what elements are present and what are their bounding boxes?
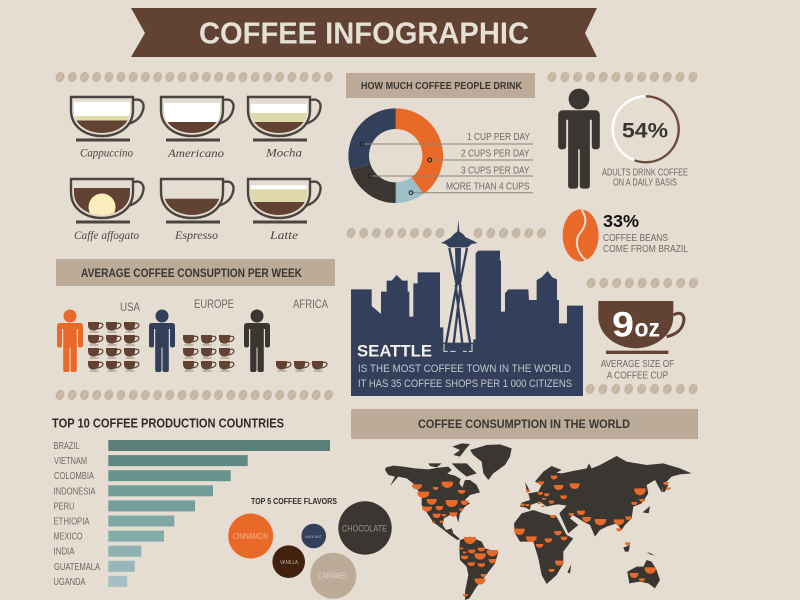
USA group: USA [120,300,140,314]
Europe group [149,297,234,372]
stat: 9oz cup: AVERAGE SIZE OF [601,359,674,370]
bar chart: top 10 countries: COLOMBIA [54,471,94,482]
panel: top 5 flavors: TOP 5 COFFEE FLAVORS [251,497,338,506]
stat: 33% coffee beans: COME FROM BRAZIL [603,244,688,255]
heading: how much coffee people drink: HOW MUCH COFFEE PEOPLE DRINK [361,80,522,92]
bar chart: top 10 countries [54,440,330,588]
heading: how much coffee people drink [346,73,535,98]
Africa group: AFRICA [293,297,328,311]
label: Espresso: Espresso [174,228,218,242]
bubble: caramel [310,553,356,599]
bar chart: top 10 countries: PERU [54,501,74,512]
bar chart: top 10 countries: UGANDA [54,577,86,588]
bubble: vanilla: VANILLA [280,560,299,566]
bar chart: top 10 countries: ETHIOPIA [54,516,90,528]
bubble: hazelnut: HAZE NUT [305,534,322,539]
bubble: cinnamon [228,514,273,558]
bubble: chocolate: CHOCOLATE [342,523,387,533]
heading: coffee consumption in the world: COFFEE CONSUMPTION IN THE WORLD [418,417,630,431]
Europe group: EUROPE [194,297,234,311]
bar chart: top 10 countries: MEXICO [54,532,83,543]
icon: adult person [558,89,600,189]
bar chart: top 10 countries: INDIA [54,547,75,558]
label: Latte: Latte [269,228,299,242]
stat: 33% coffee beans: 33% [603,211,639,231]
bean divider: middle [345,226,548,240]
Africa group [244,297,328,372]
stat: 9oz cup [598,301,684,382]
donut chart: cups per day: MORE THAN 4 CUPS [446,181,530,192]
panel: Seattle skyline: SEATTLE [357,343,432,361]
donut chart: cups per day: 2 CUPS PER DAY [461,149,530,160]
heading: top 10 production countries: TOP 10 COFFEE PRODUCTION COUNTRIES [52,417,284,431]
stat: 9oz cup: A COFFEE CUP [607,370,668,382]
stat: 54% adults: 54% [622,120,668,143]
stat: 54% adults: ADULTS DRINK COFFEE [602,167,688,178]
title banner [131,8,597,57]
stat: 33% coffee beans [603,211,688,255]
panel: weekly consumption by region [57,297,328,372]
cup: Cappuccino [70,97,144,142]
Space Needle [441,220,478,351]
bubble: cinnamon: CINNAMON [233,532,268,541]
bubble: vanilla [272,545,305,578]
stat: 9oz cup: oz [634,315,660,343]
bean divider: lower left [54,388,334,402]
bean divider: top right [546,70,699,84]
panel: Seattle skyline [351,220,583,396]
label: Cappuccino: Cappuccino [80,146,133,160]
stat: 54% adults [602,96,688,188]
donut chart: cups per day [359,119,533,195]
bubble: hazelnut [301,524,326,548]
cup: Caffe affogato [70,179,144,224]
bubble: caramel: CARAMEL [318,572,348,580]
stat: 33% coffee beans: COFFEE BEANS [603,233,668,244]
panel: top 5 flavors [228,497,392,599]
donut chart: cups per day: 1 CUP PER DAY [467,132,530,143]
USA group [57,300,140,372]
bean divider: top left [54,70,334,84]
cup: Mocha [247,97,321,142]
cup: Espresso [160,179,234,224]
heading: average coffee consumption per week: AVERAGE COFFEE CONSUPTION PER WEEK [81,266,302,280]
stat: 54% adults: ON A DAILY BASIS [613,178,677,188]
bubble: chocolate [338,501,392,555]
label: Mocha: Mocha [265,146,302,160]
bean divider: right upper [585,276,699,290]
label: Caffe affogato: Caffe affogato [74,228,139,242]
world map [385,443,692,600]
donut chart: cups per day: 3 CUPS PER DAY [461,166,530,176]
icon: coffee bean [563,209,599,261]
bar chart: top 10 countries: GUATEMALA [54,562,100,573]
panel: coffee types [70,97,321,242]
heading: average coffee consumption per week [56,259,335,286]
bar chart: top 10 countries: INDONESIA [54,486,96,497]
bar chart: top 10 countries: VIETNAM [54,456,87,467]
bean divider: right lower [584,382,699,396]
heading: coffee consumption in the world [351,409,698,439]
bar chart: top 10 countries: BRAZIL [54,441,80,452]
cup: Latte [247,179,321,224]
panel: Seattle skyline: IT HAS 35 COFFEE SHOPS PER 1 000 CITIZENS [358,378,572,390]
cup: Americano [160,97,234,142]
stat: 9oz cup: 9 [612,306,634,345]
title banner: COFFEE INFOGRAPHIC [199,16,529,50]
panel: Seattle skyline: IS THE MOST COFFEE TOWN IN THE WORLD [358,363,571,375]
label: Americano: Americano [167,146,224,160]
